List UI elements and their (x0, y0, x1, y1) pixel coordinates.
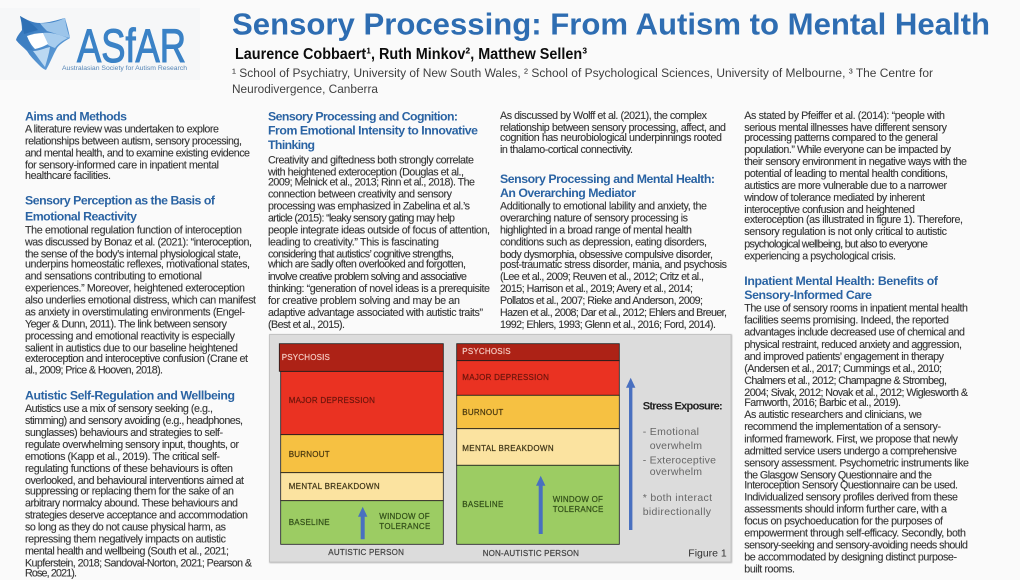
chart: non-autistic person stack (457, 344, 619, 544)
heading: sensory processing and mental health: Sensory Processing and Mental Health: (500, 172, 715, 186)
text: autistic self-regulation: Autistics use a mix of sensory seeking (e.g., (25, 403, 213, 415)
heading: inpatient mental health: Sensory-Informed Care (744, 288, 872, 302)
text: pfeiffer: population.” While everyone can be impacted by (744, 144, 952, 156)
text: sensory processing and cognition: article (2015): “leaky sensory gating may help (268, 212, 455, 224)
text: sensory perception: The emotional regulation function of interoception (25, 224, 242, 236)
authors: Laurence Cobbaert¹, Ruth Minkov², Matthew Sellen³ (235, 46, 587, 63)
text: sensory processing and mental health: conditions such as depression, eating disorders, (500, 237, 707, 249)
text: sensory perception: exteroception and interoceptive confusion (Crane et (25, 353, 248, 365)
arrow: stress exposure (626, 378, 635, 530)
text: autistic self-regulation: Rose, 2021). (25, 568, 77, 580)
text: wolff: in thalamo-cortical connectivity. (500, 144, 633, 156)
text: autistic self-regulation: mental health and wellbeing (South et al., 2021; (25, 545, 229, 557)
text: inpatient mental health: physical restraint, reduced anxiety and aggression, (744, 339, 962, 351)
heading: autistic self-regulation: Autistic Self-Regulation and Wellbeing (25, 388, 235, 402)
heading: sensory perception: Emotional Reactivity (25, 210, 137, 224)
panel: column 4 (743, 110, 969, 576)
text: sensory processing and cognition: with heightened exteroception (Douglas et al., (267, 166, 464, 178)
legend: stress exposure: - Exteroceptive (643, 454, 716, 466)
arrow: autistic window of tolerance (358, 507, 367, 539)
text: sensory processing and mental health: body dysmorphia, obsessive compulsive disorder, (500, 249, 713, 261)
text: pfeiffer: serious mental illnesses have different sensory (744, 122, 948, 134)
labels: non-autistic person stack: PSYCHOSIS (462, 347, 511, 356)
text: aims and methods (25, 124, 250, 182)
text: inpatient mental health: Farnworth, 2016; Barbic et al., 2019). (744, 397, 901, 409)
heading: stress exposure: Stress Exposure: (643, 400, 723, 412)
text: inpatient mental health: 2004; Sivak, 2012; Novak et al., 2012; Wiglesworth & (744, 387, 968, 399)
legend: stress exposure: * both interact (643, 492, 712, 504)
text: sensory perception: al., 2009; Price & Hooven, 2018). (25, 364, 163, 376)
text: inpatient mental health: empowerment through self-efficacy. Secondly, both (744, 527, 966, 539)
text: inpatient mental health: Interoception Sensory Questionnaire can be used. (744, 479, 958, 491)
text: inpatient mental health: As autistic researchers and clinicians, we (744, 409, 922, 421)
text: pfeiffer: processing patterns compared to the general (744, 132, 938, 144)
labels: non-autistic person stack: BURNOUT (462, 408, 504, 417)
text: pfeiffer: their sensory environment in negative ways with the (744, 156, 967, 168)
text: autistic self-regulation: overlooked, and behavioural interventions aimed at (25, 475, 244, 487)
text: wolff: relationship between sensory processing, affect, and (500, 122, 726, 134)
logo tagline: Australasian Society for Autism Research (62, 65, 188, 72)
caption: autistic person: AUTISTIC PERSON (328, 548, 404, 557)
text: pfeiffer: autistics are more vulnerable due to a narrower (744, 180, 947, 192)
text: sensory processing and mental health: Pollatos et al., 2007; Rieke and Anderson, 2009; (500, 295, 703, 307)
legend: stress exposure: bidirectionally (643, 506, 712, 518)
legend: stress exposure (643, 426, 716, 518)
text: sensory perception: also underlies emotional distress, which can manifest (25, 294, 256, 306)
text: sensory processing and mental health: Hazen et al., 2008; Dar et al., 2012; Ehlers and Breuer, (500, 307, 727, 319)
labels: non-autistic person stack: TOLERANCE (553, 505, 604, 514)
text: autistic self-regulation: arbitrary normalcy abound. These behaviours and (25, 497, 238, 509)
affiliations: ¹ School of Psychiatry, University of New South Wales, ² School of Psychological Sciences, University of Melbourne, ³ The Centre for (232, 66, 933, 80)
chart: autistic person stack (279, 344, 443, 544)
heading: sensory processing and mental health: An Overarching Mediator (500, 186, 636, 200)
text: autistic self-regulation: repressing them negatively impacts on autistic (25, 533, 227, 545)
text: sensory perception: the sense of the body’s internal physiological state, (25, 248, 241, 260)
text: inpatient mental health: advantages include decreased use of chemical and (744, 327, 965, 339)
text: autistic self-regulation: sunglasses) behaviours and strategies to self- (25, 427, 223, 439)
heading: sensory processing and cognition (268, 110, 478, 152)
panel: column 3 (500, 110, 727, 331)
text: aims and methods: for sensory-informed care in inpatient mental (25, 160, 219, 172)
labels: autistic person stack: WINDOW OF (379, 512, 430, 521)
text: sensory processing and cognition: Creativity and giftedness both strongly correlate (268, 154, 474, 166)
text: inpatient mental health: (Andersen et al., 2017; Cummings et al., 2010; (744, 363, 942, 375)
labels: autistic person stack: MAJOR DEPRESSION (289, 396, 375, 405)
text: sensory processing and cognition: people integrate ideas outside of focus of attention, (268, 224, 490, 236)
text: sensory processing and cognition: connection between creativity and sensory (268, 188, 453, 200)
text: inpatient mental health: admitted service users undergo a comprehensive (744, 445, 957, 457)
text: pfeiffer: sensory regulation is not only critical to autistic (744, 226, 948, 238)
text: autistic self-regulation: suppressing or replacing them for the sake of an (25, 485, 234, 497)
text: pfeiffer: exteroception (as illustrated in figure 1). Therefore, (744, 214, 963, 226)
text: inpatient mental health: focus on psychoeducation for the purposes of (744, 515, 943, 527)
caption: figure 1: Figure 1 (688, 548, 727, 560)
panel: figure 1 (270, 334, 731, 562)
text: inpatient mental health: and improved patients’ engagement in therapy (744, 351, 945, 363)
text: sensory processing and mental health: (Lee et al., 2009; Reuven et al., 2012; Critz et al., (500, 271, 704, 283)
text: sensory processing and cognition: involve creative problem solving and associative (268, 271, 467, 283)
text: sensory perception: processing and emotional reactivity is especially (25, 330, 236, 342)
text: autistic self-regulation (25, 403, 252, 580)
text: aims and methods: and mental health, and to examine existing evidence (25, 148, 250, 160)
text: sensory processing and mental health (500, 201, 727, 331)
text: sensory perception (24, 224, 256, 376)
labels: autistic person stack: BASELINE (289, 518, 330, 527)
labels: autistic person stack (282, 353, 431, 531)
text: inpatient mental health: sensory assessment. Psychometric instruments like (744, 457, 969, 469)
affiliations (232, 66, 933, 96)
labels: non-autistic person stack (462, 347, 604, 514)
heading: aims and methods: Aims and Methods (25, 110, 127, 124)
text: wolff: As discussed by Wolff et al. (2021), the complex (500, 110, 708, 122)
text: pfeiffer: experiencing a psychological crisis. (744, 250, 896, 262)
text: sensory processing and mental health: 2015; Harrison et al., 2019; Avery et al., 2014; (500, 283, 693, 295)
labels: autistic person stack: PSYCHOSIS (282, 353, 330, 362)
heading: inpatient mental health (744, 274, 939, 302)
text: pfeiffer: potential of leading to mental health conditions, (744, 168, 948, 180)
heading: sensory perception (25, 194, 216, 224)
caption: non-autistic person: NON-AUTISTIC PERSON (483, 549, 579, 558)
text: autistic self-regulation: stimming) and sensory avoiding (e.g., headphones, (25, 415, 243, 427)
logo: ASfAR (0, 8, 200, 80)
text: inpatient mental health: be accommodated by designing distinct purpose- (744, 552, 957, 564)
text: sensory processing and mental health: overarching nature of sensory processing is (500, 213, 688, 225)
text: wolff (500, 110, 726, 156)
labels: autistic person stack: TOLERANCE (379, 522, 431, 531)
text: sensory perception: underpins homeostatic reflexes, motivational states, (25, 258, 250, 270)
text: sensory processing and mental health: 1992; Ehlers, 1993; Glenn et al., 2016; Ford, 2014). (500, 319, 716, 331)
text: aims and methods: healthcare facilities. (25, 170, 111, 182)
text: sensory processing and mental health: Additionally to emotional lability and anxiety, the (500, 201, 707, 213)
text: sensory processing and mental health: highlighted in a broad range of mental health (500, 225, 692, 237)
logo wordmark: ASfAR (77, 19, 186, 72)
text: inpatient mental health: The use of sensory rooms in inpatient mental health (744, 303, 968, 315)
text: sensory processing and cognition: which are sadly often overlooked and forgotten, (267, 258, 466, 270)
text: pfeiffer: psychological wellbeing, but also to everyone (744, 238, 928, 250)
legend: stress exposure: - Emotional (643, 426, 699, 438)
text: sensory processing and cognition: considering that autistics’ cognitive strengths, (268, 248, 454, 260)
text: autistic self-regulation: regulating functions of these behaviours is often (25, 463, 233, 475)
heading: sensory processing and cognition: Sensory Processing and Cognition: (268, 110, 458, 124)
text: pfeiffer (743, 110, 967, 262)
text: aims and methods: relationships between autism, sensory processing, (25, 136, 242, 148)
text: inpatient mental health: built rooms. (744, 564, 795, 576)
text: aims and methods: A literature review was undertaken to explore (25, 124, 219, 136)
arrow: non-autistic window of tolerance (536, 476, 545, 534)
text: inpatient mental health: Chalmers et al., 2012; Champagne & Strombeg, (744, 375, 947, 387)
heading: sensory processing and mental health (500, 172, 715, 200)
text: sensory processing and cognition: adaptive advantage associated with autistic traits” (268, 307, 483, 319)
text: inpatient mental health (744, 303, 969, 576)
text: sensory perception: Yeger & Dunn, 2011). The link between sensory (25, 318, 228, 330)
title: Sensory Processing: From Autism to Mental Health (232, 6, 990, 42)
text: inpatient mental health: the Glasgow Sensory Questionnaire and the (744, 469, 932, 481)
text: autistic self-regulation: Kupferstein, 2018; Sandoval-Norton, 2021; Pearson & (25, 557, 252, 569)
heading: sensory processing and cognition: Thinking (268, 138, 315, 152)
panel: column 2 (267, 110, 490, 331)
text: sensory perception: as anxiety in overstimulating environments (Engel- (25, 306, 245, 318)
text: inpatient mental health: recommend the implementation of a sensory- (744, 421, 941, 433)
text: sensory processing and cognition: processing was emphasized in Zabelina et al.’s (268, 200, 470, 212)
labels: non-autistic person stack: MENTAL BREAKDOWN (462, 444, 554, 453)
heading: sensory perception: Sensory Perception as the Basis of (25, 194, 216, 208)
text: inpatient mental health: Individualized sensory profiles derived from these (744, 491, 958, 503)
text: sensory processing and cognition: 2009; Melnick et al., 2013; Rinn et al., 2018). The (268, 176, 475, 188)
text: sensory processing and cognition: (Best et al., 2015). (268, 319, 345, 331)
labels: non-autistic person stack: MAJOR DEPRESSION (462, 373, 549, 382)
text: autistic self-regulation: emotions (Kapp et al., 2019). The critical self- (25, 451, 220, 463)
labels: non-autistic person stack: WINDOW OF (553, 495, 603, 504)
labels: non-autistic person stack: BASELINE (462, 500, 504, 509)
text: autistic self-regulation: strategies deserve acceptance and accommodation (25, 509, 248, 521)
text: sensory perception: and sensations contributing to emotional (25, 270, 202, 282)
text: sensory processing and mental health: post-traumatic stress disorder, mania, and psychosis (500, 259, 727, 271)
labels: autistic person stack: MENTAL BREAKDOWN (289, 482, 380, 491)
text: autistic self-regulation: so long as they do not cause physical harm, as (25, 521, 226, 533)
text: wolff: cognition has neurobiological underpinnings rooted (500, 132, 722, 144)
text: sensory processing and cognition: leading to creativity.” This is fascinating (268, 236, 439, 248)
legend: stress exposure: overwhelm (650, 466, 702, 478)
text: pfeiffer: interoceptive confusion and heightened (744, 204, 915, 216)
text: inpatient mental health: sensory-seeking and sensory-avoiding needs should (744, 539, 968, 551)
text: sensory perception: salient in autistics due to our baseline heightened (25, 342, 238, 354)
text: pfeiffer: As stated by Pfeiffer et al. (2014): “people with (744, 110, 945, 122)
text: sensory perception: was discussed by Bonaz et al. (2021): “interoception, (24, 236, 252, 248)
affiliations: Neurodivergence, Canberra (232, 82, 378, 96)
panel: column 1 (24, 110, 256, 580)
labels: autistic person stack: BURNOUT (289, 450, 330, 459)
heading: inpatient mental health: Inpatient Mental Health: Benefits of (744, 274, 939, 288)
text: sensory perception: experiences.” Moreover, heightened exteroception (25, 282, 245, 294)
text: inpatient mental health: assessments should inform further care, with a (744, 503, 947, 515)
text: sensory processing and cognition (267, 154, 490, 331)
heading: sensory processing and cognition: From Emotional Intensity to Innovative (268, 124, 478, 138)
text: autistic self-regulation: regulate overwhelming sensory input, thoughts, or (25, 439, 239, 451)
text: inpatient mental health: facilities seems promising. Indeed, the reported (744, 315, 949, 327)
text: pfeiffer: window of tolerance mediated by inherent (743, 192, 925, 204)
legend: stress exposure: overwhelm (650, 440, 702, 452)
text: sensory processing and cognition: thinking: “generation of novel ideas is a prerequisite (268, 283, 490, 295)
text: inpatient mental health: informed framework. First, we propose that newly (744, 433, 959, 445)
icon: swirl triangle (16, 16, 70, 70)
text: sensory processing and cognition: for creative problem solving and may be an (268, 295, 460, 307)
